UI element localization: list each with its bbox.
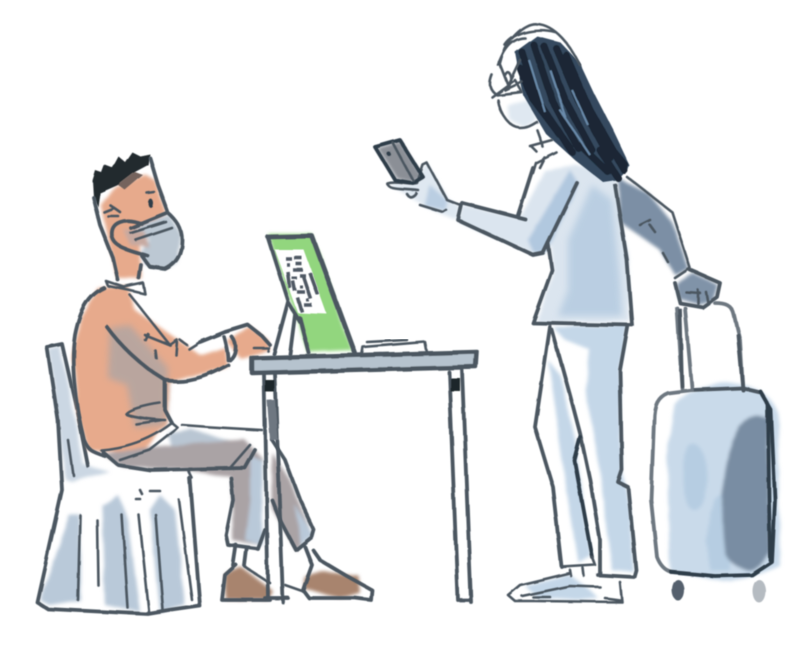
suitcase: fills (667, 384, 780, 580)
suitcase: outlines (651, 303, 775, 576)
woman: watercolour fills (377, 100, 718, 600)
laptop: green QR screen (268, 234, 355, 354)
man: seated figure (73, 152, 372, 600)
man: arm shadow (108, 325, 168, 428)
man: outlines (73, 158, 372, 600)
man: watercolour fills (73, 174, 360, 600)
notepad on desk (362, 340, 427, 353)
woman: standing figure (375, 24, 720, 602)
chair (37, 344, 200, 614)
woman: jacket shading (558, 185, 622, 316)
laptop: white code area (275, 250, 327, 314)
suitcase: wheels (672, 580, 766, 602)
laptop: QR code marks (286, 258, 318, 312)
woman: hair (515, 36, 630, 182)
woman: outlines (375, 24, 720, 602)
man: hair (92, 152, 150, 207)
suitcase: wheeled luggage (651, 303, 780, 602)
desk (252, 352, 477, 602)
